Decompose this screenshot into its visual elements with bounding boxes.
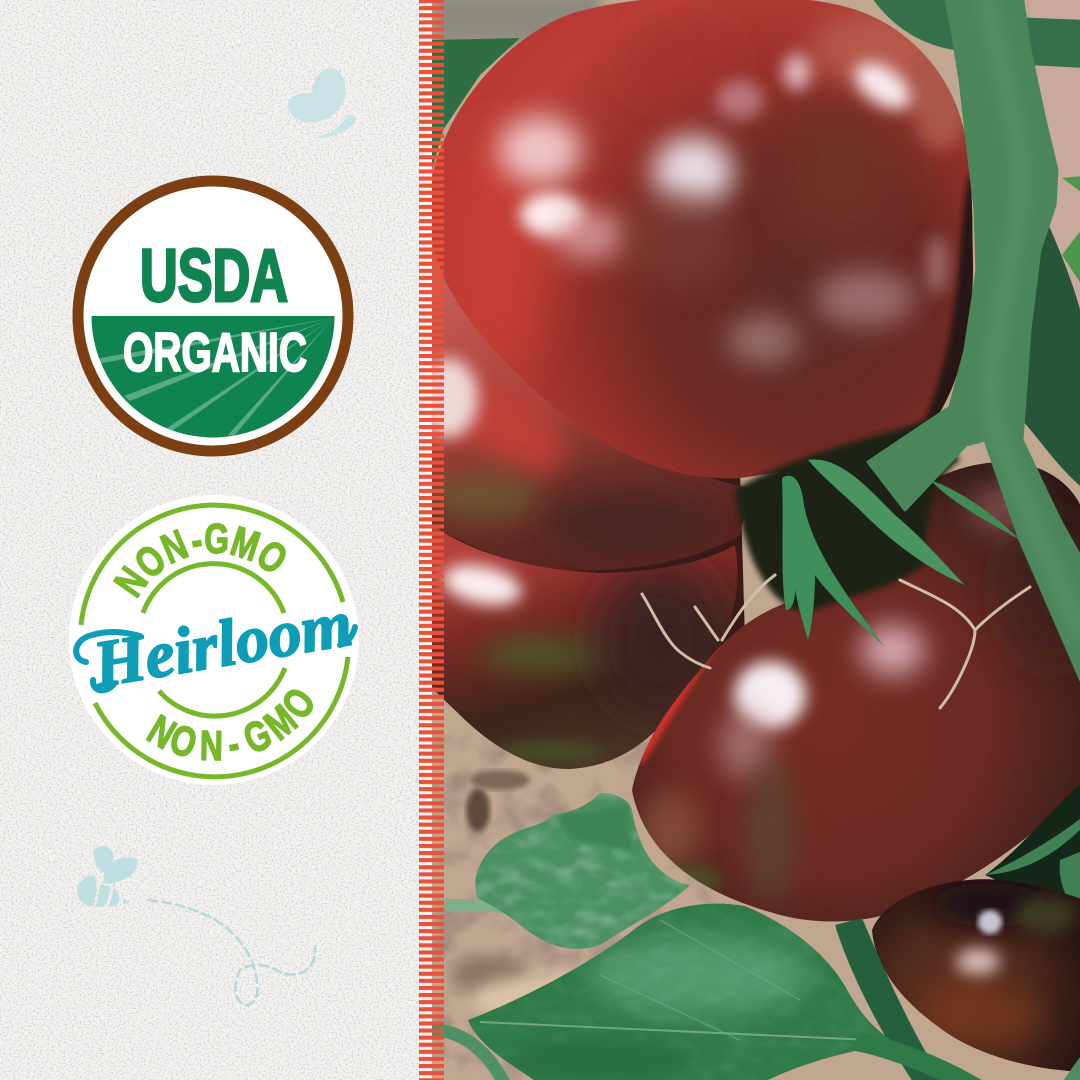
NON-GMO bottom text: O [165, 715, 202, 767]
Heirloom script word: Heirloom [87, 587, 357, 702]
soil ground [432, 0, 1080, 1080]
leaf stalk bottom right [850, 1032, 990, 1080]
leaf bottom large [468, 904, 891, 1080]
badge: Non-GMO Heirloom seal [69, 495, 359, 785]
NON-GMO bottom text: G [236, 709, 278, 763]
calyx sepals [782, 460, 1020, 646]
USDA word: USDA [140, 234, 288, 317]
ORGANIC word: ORGANIC [123, 321, 307, 383]
main green vine [868, 0, 1080, 690]
dark vine bottom [835, 918, 945, 1080]
bottom left tendril stem [432, 1030, 505, 1080]
icon: butterfly wing top [288, 68, 356, 138]
dark foliage between tomatoes [985, 784, 1080, 894]
NON-GMO bottom text: M [255, 695, 305, 749]
NON-GMO bottom text: O [272, 679, 325, 727]
icon: bee with dashed flight path [77, 846, 315, 1005]
NON-GMO top text [105, 514, 296, 605]
leaf lower left [440, 790, 695, 955]
NON-GMO top text: O [249, 530, 296, 583]
upper-left leaf [432, 38, 520, 170]
NON-GMO top text: M [225, 517, 265, 570]
small dark leaves right [985, 819, 1080, 898]
panel: linen cloth background [0, 0, 432, 1080]
tomato lobe left middle [432, 244, 746, 570]
badge: USDA Organic seal [78, 181, 348, 451]
right dark vine [1024, 226, 1080, 486]
NON-GMO bottom text [140, 679, 325, 769]
small right leaves [1062, 176, 1080, 290]
NON-GMO top text: N [154, 520, 194, 573]
bee [77, 846, 138, 907]
upper right vine [870, 0, 1080, 68]
stem top right [1064, 1057, 1080, 1080]
white sticker disc [69, 495, 359, 785]
dashed flight path [148, 900, 315, 1005]
NON-GMO top text: - [187, 516, 206, 564]
photo: heirloom tomatoes on the vine [418, 0, 1080, 1080]
NON-GMO top text: O [126, 535, 175, 587]
Heirloom swash [76, 627, 355, 690]
top large tomato [420, 0, 990, 490]
seal ring [78, 181, 348, 451]
NON-GMO top text: N [105, 559, 157, 605]
tomato bottom right [868, 870, 1080, 1075]
tomato lower right [625, 455, 1080, 930]
green field half circle [92, 316, 334, 438]
field rays [98, 318, 333, 436]
outer and inner green arcs [81, 505, 348, 777]
NON-GMO bottom text: N [140, 705, 184, 758]
calyx shadow [735, 420, 960, 611]
dark base under left tomato lobes [439, 477, 745, 648]
pale dried tendrils [642, 575, 1030, 708]
tomato lobe lower left [432, 528, 738, 769]
NON-GMO top text: G [204, 514, 230, 562]
striped edge band [419, 0, 444, 1080]
NON-GMO bottom text: - [224, 719, 243, 768]
NON-GMO bottom text: N [200, 722, 223, 769]
